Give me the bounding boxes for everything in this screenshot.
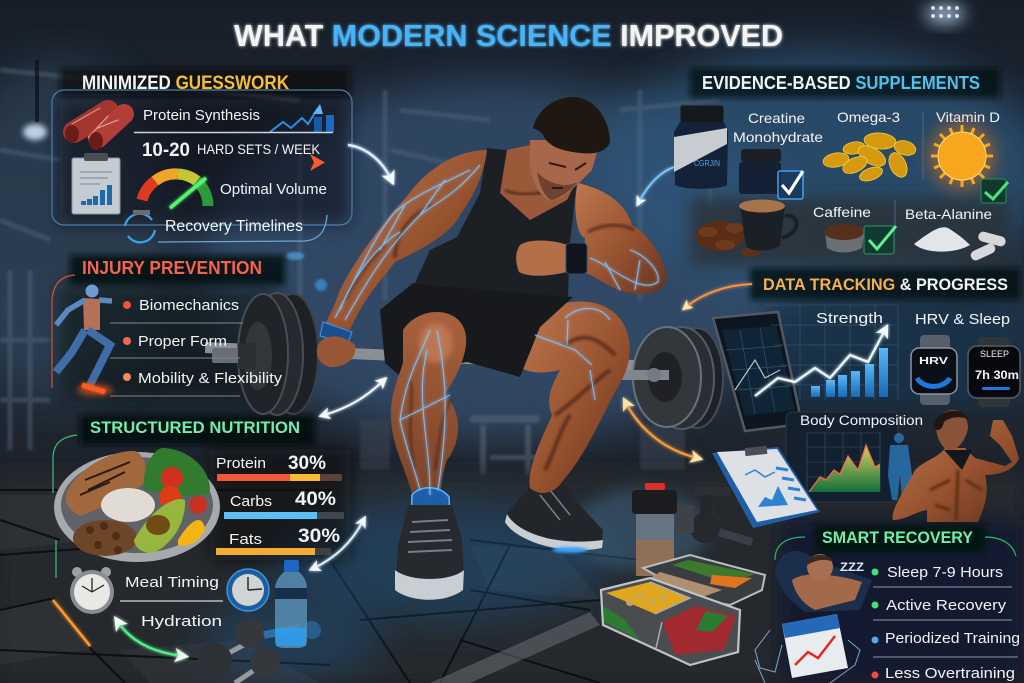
arrow: volume [135, 154, 325, 171]
macro bar: fats: 30% [298, 526, 340, 547]
icon: clipboard chart [72, 153, 120, 214]
chart: strength: Strength [816, 310, 883, 327]
text: optimal volume: Optimal Volume [220, 181, 327, 198]
icon: sleep watch: SLEEP [980, 349, 1009, 360]
rear leg [520, 302, 630, 493]
icon: sun [928, 122, 996, 190]
back shoe [505, 480, 603, 553]
icon: creatine jar [674, 105, 728, 189]
icon: powder and capsules [914, 227, 1007, 262]
icon: meal prep trays [601, 555, 765, 665]
front leg [391, 312, 466, 502]
icon: hrv watch: HRV [919, 356, 948, 367]
macro bar: protein: Protein [216, 455, 266, 472]
front shoe [395, 505, 464, 600]
icon: muscle fibres [65, 108, 124, 150]
heading: MINIMIZED GUESSWORK [82, 73, 289, 94]
macro bar: carbs: 40% [295, 489, 336, 510]
chart icon: rising [270, 104, 334, 132]
text: meal timing: Meal Timing [125, 574, 219, 591]
icon: water bottle [275, 560, 307, 648]
icon: green check [981, 179, 1008, 203]
icon: calendar [782, 614, 848, 678]
icon: sleep watch: 7h 30m [975, 368, 1019, 382]
icon: sleeping man: ZZZ [840, 560, 864, 574]
arrow: supplements to athlete [639, 167, 674, 202]
panel: data tracking [713, 275, 1020, 522]
panel: supplements [674, 73, 1008, 262]
athlete figure [317, 97, 667, 600]
title: WHAT MODERN SCIENCE IMPROVED [234, 18, 783, 53]
arrow: data tracking to athlete [686, 284, 752, 307]
text: hydration: Hydration [141, 613, 222, 630]
icon: hrv watch [911, 335, 957, 405]
left arm with hand [317, 150, 487, 367]
text: caffeine: Caffeine [813, 204, 871, 220]
item: periodized training: Periodized Training [885, 630, 1020, 647]
text: creatine monohydrate: Monohydrate [733, 129, 823, 145]
arrow: guesswork to athlete [348, 145, 391, 179]
icon: sleep watch [968, 337, 1020, 407]
head [530, 97, 610, 201]
item: mobility: Mobility & Flexibility [138, 370, 283, 387]
item: less overtraining: Less Overtraining [885, 665, 1015, 682]
background gym rack behind legs [360, 415, 685, 475]
ankle glow band [411, 488, 450, 520]
item: sleep: Sleep 7-9 Hours [887, 564, 1003, 581]
item: biomechanics: Biomechanics [139, 297, 239, 314]
text: beta-alanine: Beta-Alanine [905, 206, 992, 222]
panel: smart recovery [755, 528, 1020, 683]
icon: caffeine bowl with check [824, 224, 896, 254]
text: creatine monohydrate: Creatine [748, 110, 805, 126]
arrow: hydration green [118, 622, 182, 656]
item: active recovery: Active Recovery [886, 597, 1007, 614]
icon: alarm clock [70, 567, 114, 614]
macro bar: protein [216, 453, 342, 481]
muscle energy veins [335, 165, 658, 495]
text: omega-3: Omega-3 [837, 109, 900, 125]
icon: gauge [142, 174, 208, 208]
macro bar: fats [216, 526, 340, 555]
macro bar: fats: Fats [229, 531, 262, 548]
text: body composition: Body Composition [800, 413, 923, 428]
macro bar: carbs: Carbs [230, 493, 272, 510]
panel: structured nutrition [53, 418, 344, 683]
heading: DATA TRACKING & PROGRESS [763, 275, 1008, 294]
text: vitamin d: Vitamin D [936, 109, 1000, 125]
icon: running anatomy figure [56, 284, 113, 396]
icon: blue body figure [888, 433, 912, 500]
image: flexing man from back [893, 410, 1019, 522]
icon: small jar with check [739, 149, 803, 199]
panel: injury prevention [52, 258, 283, 396]
heading: SMART RECOVERY [822, 528, 974, 547]
text: recovery timelines: Recovery Timelines [165, 218, 303, 235]
icon: dumbbells [198, 618, 321, 683]
right arm with watch [516, 183, 667, 294]
icon: recovery cycle [125, 210, 155, 242]
icon: smartphone [713, 312, 802, 431]
shorts [380, 283, 573, 377]
left plates [212, 293, 318, 415]
heading: STRUCTURED NUTRITION [90, 418, 300, 437]
text: protein synthesis: Protein Synthesis [143, 107, 260, 124]
arrow: nutrition to athlete [324, 381, 383, 415]
icon: meal plate [54, 448, 220, 562]
icon: creatine jar: CGRJIN [694, 159, 720, 168]
macro bar: protein: 30% [288, 453, 326, 474]
icon: coffee cup and beans [696, 200, 797, 257]
icon: clipboard report [712, 446, 820, 528]
arrow: barbell to recovery [626, 403, 697, 458]
icon: dumbbell on floor [676, 487, 752, 543]
text: sets per week: HARD SETS / WEEK [197, 142, 320, 157]
chart: strength [755, 305, 898, 400]
heading: INJURY PREVENTION [82, 258, 262, 278]
arrow: hydration to athlete [314, 521, 363, 568]
icon: outline bottle and cord [755, 630, 860, 683]
text: sets per week: 10-20 [142, 140, 190, 161]
heading: EVIDENCE-BASED SUPPLEMENTS [702, 73, 980, 93]
macro bar: carbs [224, 489, 344, 519]
text: sets per week [142, 140, 320, 161]
text: creatine monohydrate [733, 110, 823, 145]
chart: body composition [786, 412, 898, 502]
icon: sleeping man [775, 551, 872, 612]
item: proper form: Proper Form [138, 333, 227, 350]
text: hrv and sleep: HRV & Sleep [915, 311, 1010, 328]
icon: protein shaker [632, 483, 677, 576]
right plates [617, 327, 723, 429]
panel: minimized guesswork [52, 73, 352, 242]
torso tank top [415, 148, 577, 297]
barbell [205, 293, 723, 429]
icon: omega capsules [822, 132, 917, 184]
icon: timer [227, 569, 269, 611]
